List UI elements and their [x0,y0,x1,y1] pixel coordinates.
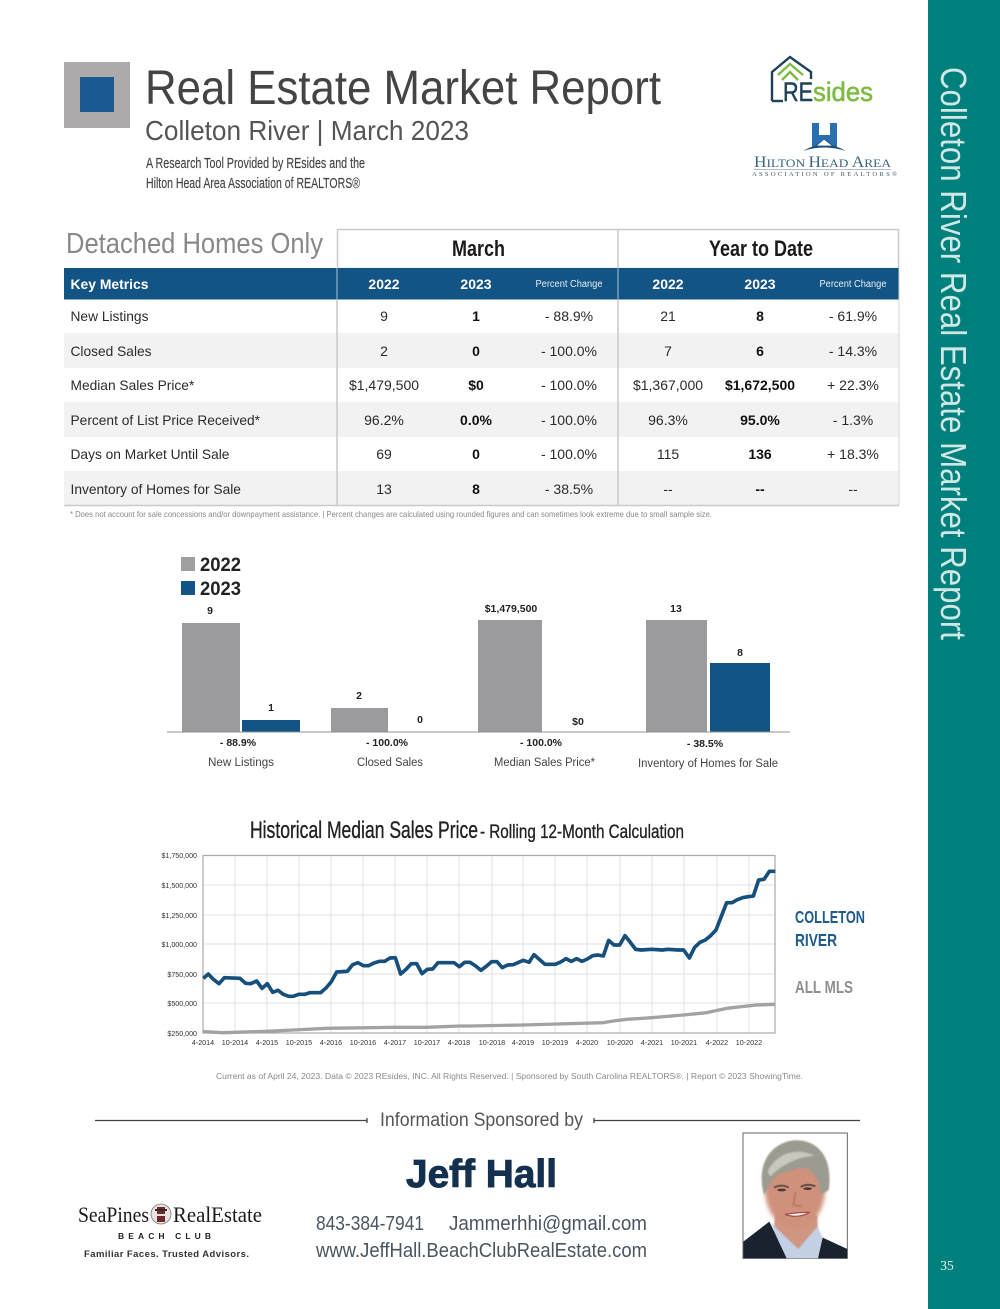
chart title: - Rolling 12-Month Calculation [480,822,684,843]
row: Days on Market Until Sale: Days on Market Until Sale [70,447,230,462]
chart title: Historical Median Sales Price [250,817,478,844]
row: Median Sales Price: $0 [468,377,484,393]
sponsor heading: Information Sponsored by [380,1110,583,1131]
attribution text: Hilton Head Area Association of REALTORS® [146,175,360,192]
row: Percent of List Price Received: - 100.0% [541,412,597,428]
y axis labels [161,852,197,1038]
bars: Closed Sales: 2 [356,690,362,702]
subtitle: Colleton River | March 2023 [145,115,469,146]
x axis labels: 4-2014 [192,1038,214,1047]
logo: Sea Pines Real Estate Beach Club: Familiar Faces. Trusted Advisors. [84,1249,249,1260]
sponsor contact details: www.JeffHall.BeachClubRealEstate.com [315,1240,647,1262]
bars: New Listings [182,605,300,769]
sponsor heading [95,1110,860,1131]
x axis labels: 4-2019 [512,1038,534,1047]
face [762,1166,828,1222]
table row shading [64,333,899,505]
bar chart: March 2022 vs 2023 [167,555,790,770]
row: Closed Sales: - 100.0% [541,343,597,359]
legend label: All MLS: ALL MLS [795,977,853,997]
attribution text [146,155,365,192]
row: New Listings: 21 [660,308,676,324]
row: Percent of List Price Received: 95.0% [740,412,780,428]
bars: New Listings: New Listings [208,757,274,769]
sponsor contact details: Jammerhhi@gmail.com [449,1213,647,1235]
bars: Median Sales Price [478,603,596,769]
title block [145,62,661,192]
legend label: Colleton River: RIVER [795,930,837,950]
row: New Listings: 1 [472,308,480,324]
x axis labels: 10-2016 [350,1038,376,1047]
y axis labels: $1,500,000 [161,882,197,890]
logo: REsides: sides [813,77,873,107]
row: Percent of List Price Received: 0.0% [460,412,493,428]
x axis labels: 10-2021 [671,1038,697,1047]
row: Inventory of Homes for Sale: -- [755,481,765,497]
row: Inventory of Homes for Sale: Inventory of Homes for Sale [70,482,241,497]
column group: Year to Date: Year to Date [709,236,813,261]
table header row: Key Metrics [70,276,149,292]
row: Closed Sales: 0 [472,343,480,359]
x axis labels: 4-2020 [576,1038,598,1047]
series: Colleton River [203,871,775,996]
panel: teal sidebar [928,0,1000,1309]
x axis labels: 4-2016 [320,1038,342,1047]
table header row: 2022 [368,276,400,292]
attribution text: A Research Tool Provided by REsides and the [146,155,365,172]
bars: New Listings: - 88.9% [220,737,257,749]
eyes and brows [774,1185,815,1188]
y axis labels: $250,000 [167,1030,197,1038]
bars: New Listings: 9 [207,605,213,617]
table footnote: * Does not account for sale concessions and/or downpayment assistance. | Percent changes are calculated using rounded figures and can sometimes look extreme due to small sample size. [70,509,712,519]
y axis labels: $1,250,000 [161,912,197,920]
table header row: 2023 [744,276,776,292]
bars: Closed Sales: Closed Sales [357,757,423,769]
x axis labels: 10-2020 [607,1038,633,1047]
heading: Detached Homes Only: Detached Homes Only [66,228,323,260]
row: Percent of List Price Received: 96.2% [364,412,404,428]
bars: Median Sales Price: Median Sales Price* [494,757,596,769]
x axis labels: 4-2021 [641,1038,663,1047]
logo: Hilton Head Area Association of Realtors: ASSOCIATION OF REALTORS® [752,171,897,178]
shirt [770,1222,824,1258]
x axis labels: 10-2019 [542,1038,568,1047]
row: Inventory of Homes for Sale: - 38.5% [545,481,593,497]
logo: REsides: RE [783,77,813,107]
logo: Sea Pines Real Estate Beach Club: SeaPines [78,1202,149,1227]
row: Days on Market Until Sale: 115 [657,446,679,462]
logo: Sea Pines Real Estate Beach Club: RealEstate [173,1202,262,1227]
x axis labels: 4-2022 [706,1038,728,1047]
row: Closed Sales: 6 [756,343,764,359]
bars: Inventory of Homes for Sale [638,603,778,770]
row: Inventory of Homes for Sale [70,481,858,497]
title: Real Estate Market Report [145,62,661,115]
bars: New Listings: 1 [268,702,274,714]
bars: Inventory of Homes for Sale: - 38.5% [687,738,724,750]
legend [181,555,241,600]
neck [773,1214,819,1250]
row: Closed Sales: 7 [664,343,672,359]
legend: 2023 [200,579,241,600]
table: key metrics [64,228,899,519]
column group: March: March [452,236,505,261]
bars: Closed Sales: 0 [417,714,423,726]
logo: REsides [772,57,873,107]
sidebar title: Colleton River Real Estate Market Report [933,67,974,640]
y axis labels: $1,000,000 [161,941,197,949]
table header row: Percent Change [820,279,887,290]
row: Percent of List Price Received [70,412,873,428]
logo: Hilton Head Area Association of Realtors: HILTON HEAD AREA [754,154,891,171]
line chart: historical median sales price [161,817,865,1047]
hair [762,1140,830,1195]
y axis labels: $1,750,000 [161,852,197,860]
row: Closed Sales: Closed Sales [70,344,152,359]
bars: Inventory of Homes for Sale: 13 [670,603,682,615]
row: Closed Sales: 2 [380,343,388,359]
y axis labels: $750,000 [167,971,197,979]
x axis labels: 10-2018 [479,1038,505,1047]
row: Median Sales Price: $1,479,500 [349,377,419,393]
row: New Listings: 8 [756,308,764,324]
bars: Median Sales Price: $1,479,500 [485,603,537,615]
row: Median Sales Price [70,377,879,393]
smile [785,1212,810,1216]
bars: Inventory of Homes for Sale: 8 [737,647,743,659]
table header row [64,268,899,300]
row: Days on Market Until Sale: 136 [748,446,772,462]
sponsor contact details: 843-384-7941 [316,1213,424,1235]
sponsor contact details [315,1213,647,1262]
row: Days on Market Until Sale: + 18.3% [827,446,879,462]
row: Days on Market Until Sale [70,446,879,462]
page number: 35 [940,1258,954,1273]
row: Percent of List Price Received: - 1.3% [833,412,873,428]
y axis labels: $500,000 [167,1000,197,1008]
logo: Sea Pines Real Estate Beach Club [78,1202,262,1260]
x axis labels: 4-2015 [256,1038,278,1047]
bars: Median Sales Price: - 100.0% [520,737,563,749]
row: Median Sales Price: Median Sales Price* [70,378,195,393]
table header row: 2023 [460,276,492,292]
row: Percent of List Price Received: Percent of List Price Received* [70,413,261,428]
series: All MLS [203,1004,775,1033]
table header row: 2022 [652,276,684,292]
row: Inventory of Homes for Sale: -- [848,481,858,497]
row: Inventory of Homes for Sale: -- [663,481,673,497]
row: Inventory of Homes for Sale: 8 [472,481,480,497]
row: Closed Sales [70,343,877,359]
row: Days on Market Until Sale: 0 [472,446,480,462]
x axis labels: 10-2017 [414,1038,440,1047]
bars: Closed Sales [331,690,423,769]
legend label: Colleton River [795,907,865,950]
row: Median Sales Price: $1,672,500 [725,377,795,393]
logo: Sea Pines Real Estate Beach Club: BEACH CLUB [118,1231,211,1241]
row: New Listings: - 88.9% [545,308,593,324]
x axis labels: 4-2018 [448,1038,470,1047]
row: Closed Sales: - 14.3% [829,343,877,359]
legend: 2022 [200,555,241,576]
table header row: Percent Change [536,279,603,290]
bars: Closed Sales: - 100.0% [366,737,409,749]
row: Days on Market Until Sale: - 100.0% [541,446,597,462]
legend label: Colleton River: COLLETON [795,907,865,927]
x axis labels: 10-2014 [222,1038,248,1047]
bars: Median Sales Price: $0 [572,716,584,728]
sponsor name: Jeff Hall [406,1153,557,1196]
row: New Listings: - 61.9% [829,308,877,324]
row: Inventory of Homes for Sale: 13 [376,481,392,497]
row: New Listings: 9 [380,308,388,324]
row: New Listings: New Listings [70,309,149,324]
photo: Jeff Hall portrait [743,1133,847,1258]
row: Median Sales Price: - 100.0% [541,377,597,393]
row: Median Sales Price: + 22.3% [827,377,879,393]
row: New Listings [70,308,877,324]
x axis labels [192,1038,762,1047]
data credit line: Current as of April 24, 2023. Data © 2023 REsides, INC. All Rights Reserved. | Sponsored by South Carolina REALTORS®. | Report © 2023 ShowingTime. [216,1071,803,1081]
jacket [743,1222,847,1258]
x axis labels: 10-2015 [286,1038,312,1047]
icon: report square [64,62,130,128]
x axis labels: 10-2022 [736,1038,762,1047]
table top box [338,229,898,268]
row: Median Sales Price: $1,367,000 [633,377,703,393]
row: Days on Market Until Sale: 69 [376,446,392,462]
logo: Hilton Head Area Association of Realtors [752,123,897,178]
bars: Inventory of Homes for Sale: Inventory of Homes for Sale [638,758,778,770]
x axis labels: 4-2017 [384,1038,406,1047]
row: Percent of List Price Received: 96.3% [648,412,688,428]
